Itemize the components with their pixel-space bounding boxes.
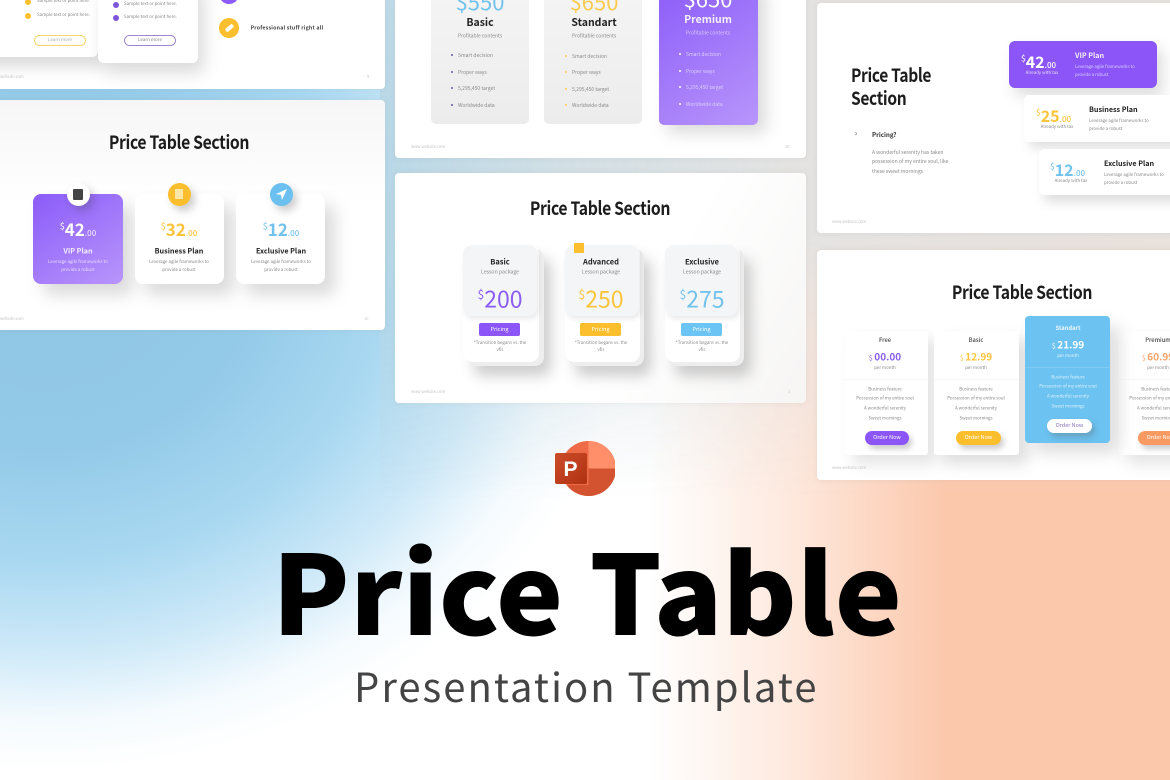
check icon <box>25 0 31 5</box>
card: VIP plan <box>33 194 123 284</box>
heading: Price Table Section <box>952 279 1092 305</box>
note: *Transition begans vs. the <box>474 340 526 346</box>
feature list: Worldwide data <box>458 102 495 108</box>
subtitle: Lesson package <box>683 268 721 275</box>
plan name: VIP Plan <box>1075 51 1104 61</box>
icon: PowerPoint logo: P <box>563 458 578 481</box>
subtitle: Lesson package <box>481 268 519 275</box>
plan name: Basic <box>969 335 983 344</box>
page number: 9 <box>367 74 369 80</box>
check icon <box>25 13 31 19</box>
paragraph: A wonderful serenity has taken <box>872 149 943 156</box>
plan name: Exclusive <box>685 256 719 267</box>
plan name: Premium <box>684 12 732 27</box>
feature list: Possession of my entire soul <box>1039 384 1097 390</box>
feature list: 5,295,450 target <box>458 84 495 92</box>
feature list: A wonderful serenity <box>1047 394 1089 400</box>
column: standart <box>1025 316 1110 443</box>
feature list: A wonderful serenity <box>864 406 906 412</box>
slide: three columns with bullets <box>395 0 806 158</box>
plan name: Business Plan <box>155 246 203 256</box>
column: premium <box>1119 331 1170 455</box>
plan description: provide a robust <box>1104 180 1137 186</box>
order button <box>1047 419 1092 433</box>
order button <box>1138 431 1170 445</box>
plan name: Business Plan <box>1089 105 1138 115</box>
plan description <box>1075 64 1135 78</box>
pricing card purple <box>98 0 198 63</box>
footer url: www.website.com <box>832 465 866 471</box>
plan description <box>251 259 311 273</box>
plan name: Standart <box>571 15 617 30</box>
paragraph: possession of my entire soul, like <box>872 158 948 165</box>
icon: bookmark <box>574 243 584 253</box>
plan description: provide a robust <box>61 267 95 273</box>
note: *Transition begans vs. the <box>575 340 627 346</box>
slide: four column pricing <box>817 250 1170 480</box>
feature list: 5,295,450 target <box>572 86 609 92</box>
card: exclusive plan <box>236 194 325 284</box>
feature list: Business feature <box>1051 374 1085 380</box>
feature list: Proper ways <box>458 68 487 76</box>
plan description <box>48 259 108 273</box>
plan name: VIP Plan <box>63 246 93 256</box>
note: vfis <box>598 347 604 353</box>
per month: per month <box>1057 353 1079 359</box>
card: exclusive <box>1039 149 1170 195</box>
plan description: provide a robust <box>1089 126 1122 132</box>
feature list: Possession of my entire soul <box>856 396 914 402</box>
heading: Section <box>851 84 906 110</box>
feature list: Business feature <box>959 386 993 392</box>
feature list: Smart decision <box>686 51 721 58</box>
plan description: Leverage agile frameworks to <box>1089 118 1149 124</box>
price: 12: $12.00 <box>263 216 299 241</box>
order button <box>956 431 1001 445</box>
plan name: Free <box>879 335 891 344</box>
plan name: Basic <box>466 15 494 30</box>
footer url: www.website.com <box>411 389 445 395</box>
note: vfis <box>698 347 705 353</box>
icon: PowerPoint logo <box>555 441 615 496</box>
pricing button: Pricing <box>693 325 710 333</box>
order button: Order Now <box>965 433 992 441</box>
price: 42: $42.00 <box>60 216 96 241</box>
check list text: Sample text or point here. <box>124 14 177 20</box>
page number: 1 <box>788 389 790 395</box>
heading <box>851 62 931 110</box>
feature list: Sweet mornings <box>1051 403 1085 409</box>
card: basic <box>463 245 558 382</box>
heading: Price Table <box>851 62 931 88</box>
note: vfis <box>496 347 503 353</box>
plan description: provide a robust <box>1075 72 1108 78</box>
feature list: A wonderful serenity <box>955 406 997 412</box>
pricing card yellow <box>0 0 98 57</box>
heading: Price Table Section <box>109 129 249 155</box>
plan description: Leverage agile frameworks to <box>1104 172 1164 178</box>
feature list <box>1039 374 1097 409</box>
icon: purple circle <box>219 0 239 4</box>
price: 32: $32.00 <box>161 216 197 241</box>
feature list: Business feature <box>868 386 902 392</box>
card: advanced <box>565 245 658 382</box>
footer url: website.com <box>0 74 24 80</box>
plan name: Standart <box>1055 323 1081 332</box>
plan name: Exclusive Plan <box>1104 159 1154 169</box>
plan description <box>1089 118 1149 132</box>
feature list: Possession of my entire soul <box>947 396 1005 402</box>
plan description: Leverage agile frameworks to <box>48 259 108 265</box>
column: standart <box>544 0 642 124</box>
feature list: Smart decision <box>572 52 607 60</box>
title: Price Table <box>272 507 902 667</box>
footer url: website.com <box>0 316 24 322</box>
plan name: Exclusive Plan <box>256 246 306 256</box>
price: $250 <box>579 280 623 314</box>
page number: 10 <box>364 316 368 322</box>
price: 12: $12.00 <box>1050 157 1085 181</box>
footer url: www.website.com <box>832 219 866 225</box>
learn more button <box>34 35 86 46</box>
price: $ 00.00 <box>869 348 901 364</box>
icon: clipboard <box>66 182 90 206</box>
per month: per month <box>874 365 896 371</box>
feature list <box>679 51 723 108</box>
plan description: provide a robust <box>162 267 196 273</box>
pricing button <box>580 323 621 336</box>
slide: top left features <box>0 0 385 89</box>
feature list <box>856 386 914 421</box>
plan description <box>1104 172 1164 186</box>
order button <box>865 431 909 445</box>
footer url: www.website.com <box>411 144 445 150</box>
feature list <box>451 52 495 108</box>
price: $ 12.99 <box>960 348 992 364</box>
icon: building <box>168 182 190 206</box>
price: $ 21.99 <box>1052 336 1084 352</box>
plan description: provide a robust <box>264 267 298 273</box>
learn more button <box>124 35 176 46</box>
check list text: Sample text or point here. <box>37 12 90 18</box>
price: 42: $42.00 <box>1021 49 1056 73</box>
check list text: Sample text or point here. <box>124 1 177 7</box>
column: basic <box>934 331 1019 455</box>
feature list <box>947 386 1005 421</box>
icon: yellow circle <box>219 18 239 38</box>
chevron: › <box>855 128 857 139</box>
feature list: 5,295,450 target <box>686 84 723 91</box>
plan subtitle: Profitable contents <box>458 32 502 40</box>
question: Pricing? <box>872 130 896 139</box>
feature list <box>565 52 609 109</box>
note: *Transition begans vs. the <box>676 340 728 346</box>
slide: three plan cards <box>0 100 385 330</box>
order button: Order Now <box>1056 421 1083 429</box>
price: 25: $25.00 <box>1036 103 1071 127</box>
column: basic <box>431 0 529 124</box>
plan description: Leverage agile frameworks to <box>251 259 311 265</box>
paragraph: these sweet mornings <box>872 168 923 175</box>
price: $200 <box>478 280 522 314</box>
tax label: Already with tax <box>1041 124 1073 130</box>
check icon <box>113 2 119 8</box>
feature list: Sweet mornings <box>959 415 993 421</box>
card: business <box>1024 95 1170 142</box>
icon: paper plane <box>270 182 292 206</box>
heading: Price Table Section <box>530 195 670 221</box>
per month: per month <box>1147 365 1169 371</box>
feature list: Worldwide data <box>572 102 609 109</box>
note <box>474 340 526 353</box>
feature label: Professional stuff right all <box>251 23 323 31</box>
card: VIP <box>1009 41 1157 88</box>
check icon <box>113 15 119 21</box>
plan subtitle: Profitable contents <box>686 30 730 36</box>
pricing button: Pricing <box>592 325 609 333</box>
note <box>676 340 728 353</box>
per month: per month <box>965 365 987 371</box>
price: $275 <box>680 280 724 314</box>
plan subtitle: Profitable contents <box>572 32 616 40</box>
feature list: Worldwide data <box>686 101 723 108</box>
subtitle: Lesson package <box>582 268 620 275</box>
tax label: Already with tax <box>1055 178 1087 184</box>
feature list: Proper ways <box>686 68 715 75</box>
feature list: Sweet mornings <box>868 415 902 421</box>
tax label: Already with tax <box>1026 70 1058 76</box>
feature list: Proper ways <box>572 69 601 76</box>
plan description <box>149 259 209 273</box>
subtitle: Presentation Template <box>354 656 818 714</box>
plan name: Advanced <box>583 256 619 267</box>
slide: horizontal plans <box>817 3 1170 233</box>
paragraph <box>872 149 948 175</box>
column: free <box>845 331 928 455</box>
slide: lesson package cards <box>395 173 806 403</box>
card: business plan <box>135 194 224 284</box>
feature list: Smart decision <box>458 52 493 58</box>
learn more button: Learn more <box>138 37 162 43</box>
column: premium <box>659 0 758 125</box>
pricing button <box>479 323 520 336</box>
learn more button: Learn more <box>48 37 72 43</box>
pricing button <box>681 323 722 336</box>
feature list <box>1129 386 1170 421</box>
pricing button: Pricing <box>491 325 508 333</box>
plan description: Leverage agile frameworks to <box>149 259 209 265</box>
page number: 10 <box>785 144 789 150</box>
order button: Order Now <box>873 433 901 441</box>
plan description: Leverage agile frameworks to <box>1075 64 1135 70</box>
card: exclusive <box>665 245 758 382</box>
note <box>575 340 628 353</box>
plan name: Basic <box>490 256 510 267</box>
